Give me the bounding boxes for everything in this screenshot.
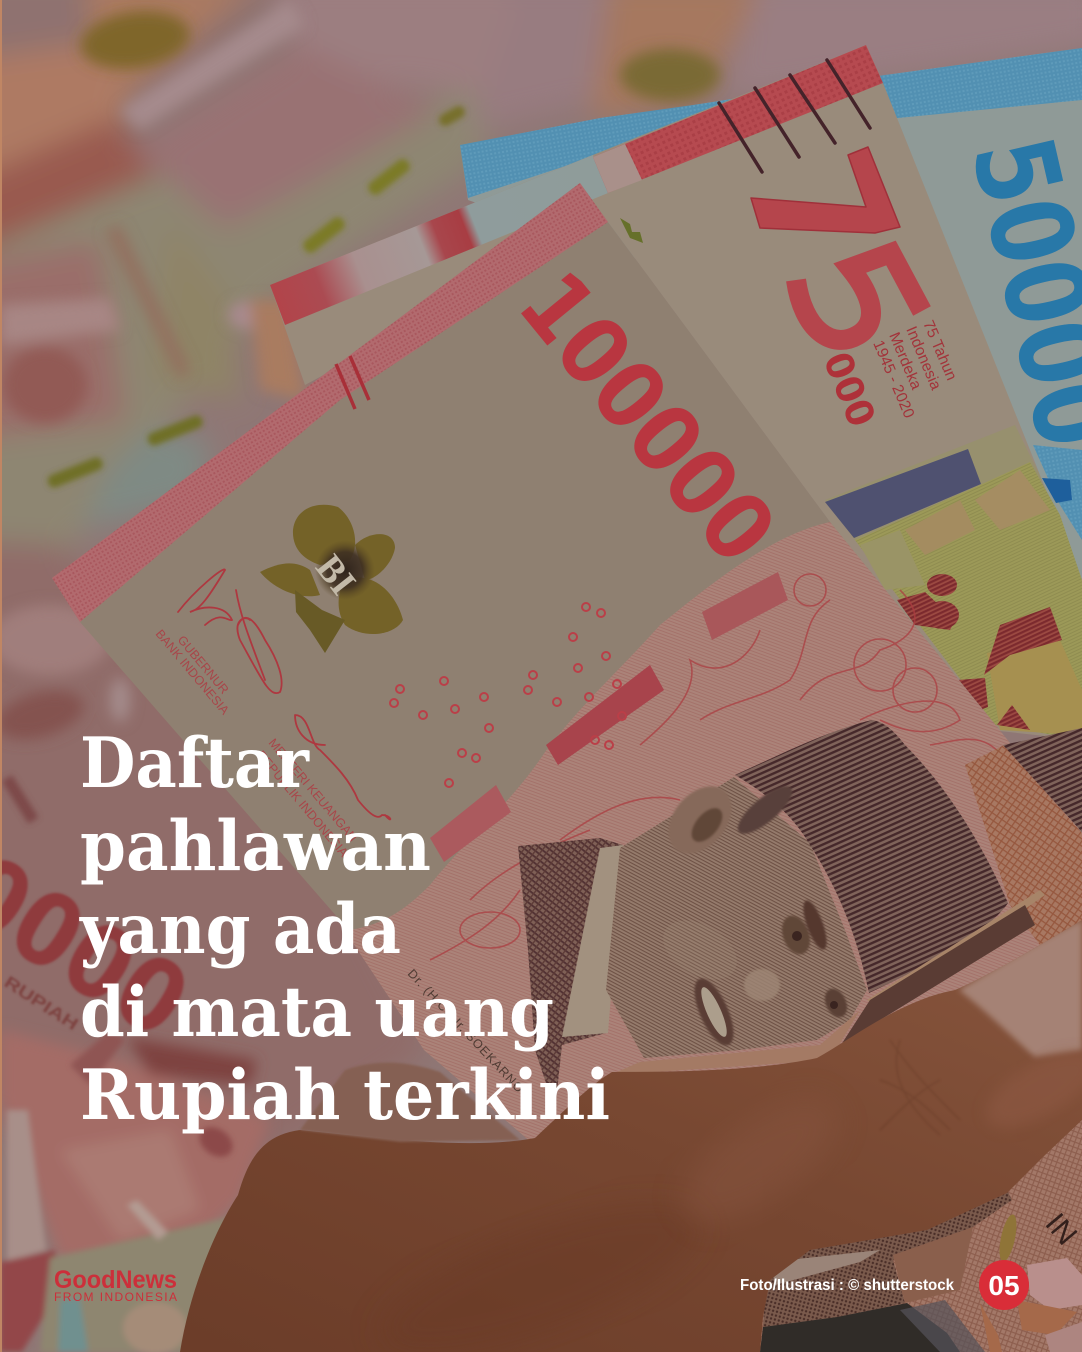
- songkok cap: [735, 720, 1008, 993]
- pink band: [52, 183, 608, 622]
- cream pattern patches: [825, 425, 1042, 560]
- title: [79, 723, 610, 1136]
- thumbnail and skin shading: [363, 920, 1082, 1352]
- red security patches: [546, 665, 664, 765]
- caption 75 Tahun Indonesia Merdeka: [869, 318, 960, 421]
- hand holding notes: [180, 920, 1082, 1352]
- map shapes: [1027, 1258, 1082, 1310]
- caption 75 Tahun Indonesia Merdeka: 75 Tahun: [919, 318, 960, 383]
- left edge line: [0, 0, 2, 1352]
- signatures: [178, 569, 390, 819]
- BI monogram: BI: [307, 547, 364, 603]
- Gubernur caption: REPUBLIK INDONESIA: [254, 748, 351, 860]
- olive registration mark: [620, 218, 643, 243]
- Gubernur caption: [153, 627, 360, 860]
- blurred pink banknote at lower left: [0, 832, 270, 1352]
- twin stripes on band: [336, 356, 369, 409]
- title: Rupiah terkini: [80, 1055, 610, 1136]
- nose: [744, 969, 780, 1001]
- lower note fold: [867, 890, 1045, 1010]
- eyes: [777, 912, 815, 958]
- caption 75 Tahun Indonesia Merdeka: Merdeka: [885, 330, 925, 392]
- page number badge: [979, 1260, 1029, 1310]
- jacket: [518, 838, 623, 1110]
- smile: [687, 973, 741, 1051]
- yellow panel: [855, 462, 1082, 740]
- finger behind note: [300, 1063, 520, 1142]
- red floral line work: [430, 574, 1005, 960]
- title: pahlawan: [80, 806, 431, 887]
- ear: [656, 774, 744, 866]
- cheek highlight: [653, 908, 747, 992]
- caption 75 Tahun Indonesia Merdeka: 1945 - 2020: [869, 338, 917, 421]
- red band: [593, 45, 883, 193]
- hair at temple: [731, 779, 799, 841]
- Gubernur caption: BANK INDONESIA: [153, 627, 232, 718]
- title: yang ada: [79, 889, 401, 970]
- guilloche pink panel: [345, 522, 1082, 1150]
- icon: orchid emblem: [260, 505, 403, 653]
- page number badge: 05: [988, 1270, 1020, 1301]
- Gubernur caption: MENTERI KEUANGAN: [266, 736, 360, 844]
- number 100000: 100000: [498, 252, 796, 583]
- purple security stripe: [825, 449, 981, 538]
- knuckle wrinkles: [896, 1048, 929, 1102]
- lower right banknote behind the hand: [760, 1100, 1082, 1352]
- small 000: 000: [815, 346, 884, 433]
- left security strip of 75000 note: [270, 155, 608, 325]
- red dancer figure: [897, 574, 1082, 735]
- portrait: Soekarno engraving: [518, 720, 1082, 1110]
- title: Daftar: [80, 723, 311, 804]
- banknote: 50000 blue: [460, 48, 1082, 600]
- title: di mata uang: [80, 972, 554, 1053]
- banknote: 100000 main: [52, 183, 1082, 1150]
- banknote: 75000 commemorative: [270, 45, 1082, 740]
- dark lower note: [760, 1303, 960, 1352]
- blurred pink banknote at lower left: RUPIAH: [1, 972, 82, 1034]
- photo credit: Foto/Ilustrasi : © shutterstock: [740, 1277, 954, 1294]
- partial lettering on note: IN: [1039, 1207, 1082, 1251]
- orange batik corner: [965, 745, 1082, 945]
- caption 75 Tahun Indonesia Merdeka: Indonesia: [902, 324, 944, 393]
- logo: GoodNews from Indonesia: FROM INDONESIA: [54, 1290, 177, 1304]
- signer name: Dr. (H.C.) Ir. SOEKARNO: [405, 966, 527, 1096]
- Gubernur caption: GUBERNUR: [175, 633, 231, 697]
- face: [606, 777, 867, 1058]
- four dark tally stripes: [719, 60, 870, 172]
- collar: [562, 845, 623, 1037]
- microtext dots: [390, 603, 626, 787]
- logo: GoodNews from Indonesia: GoodNews: [54, 1266, 177, 1294]
- number 75: [751, 147, 922, 340]
- blue band: [460, 48, 1082, 198]
